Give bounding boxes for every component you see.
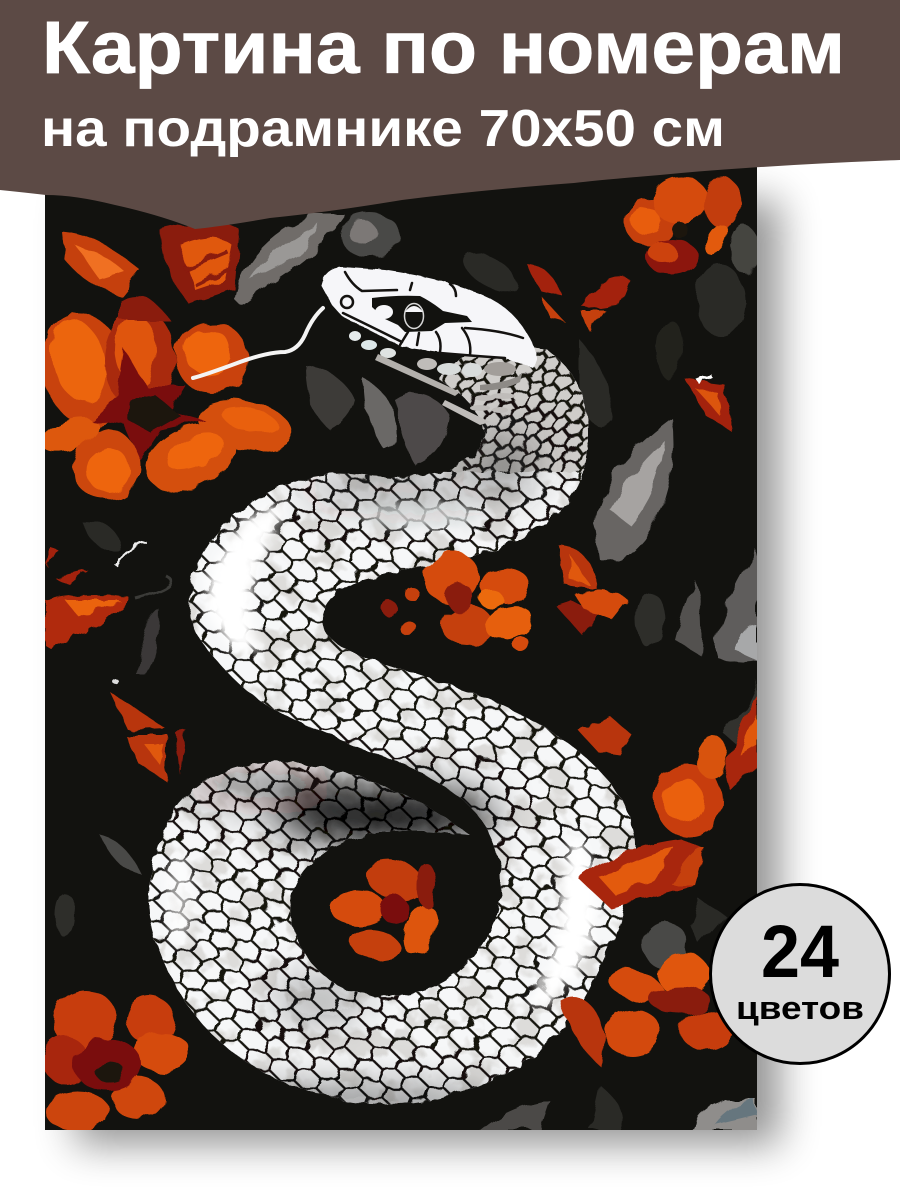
painting canvas xyxy=(29,150,759,1132)
flower: bottom left xyxy=(43,990,190,1132)
lower jaw scales xyxy=(349,331,522,425)
highlights on body xyxy=(166,500,596,1006)
badge: 24 colours: 24 xyxy=(761,910,839,993)
snake body with scales xyxy=(148,348,636,1105)
flower: right xyxy=(578,695,757,908)
butterfly: small right xyxy=(686,376,732,432)
butterfly: top centre xyxy=(525,262,630,332)
badge: 24 colours xyxy=(710,884,890,1064)
nostril xyxy=(341,296,353,308)
butterfly: left middle xyxy=(45,541,145,648)
head plate markings xyxy=(343,272,523,358)
title: Картина по номерам xyxy=(42,6,845,89)
snake tongue xyxy=(193,308,323,378)
butterfly: top left xyxy=(62,222,240,320)
canvas drop shadow xyxy=(75,200,780,1145)
large scale net xyxy=(148,470,634,1105)
snake head xyxy=(321,267,537,425)
butterfly: centre right xyxy=(555,545,628,635)
header banner xyxy=(0,0,900,229)
flower: bottom right xyxy=(560,953,732,1068)
subtitle: на подрамнике 70х50 см xyxy=(41,100,725,158)
gray foliage xyxy=(55,213,759,1130)
flower: centre xyxy=(382,552,536,651)
flower: lower centre xyxy=(330,858,439,962)
small plate left of eye xyxy=(375,305,393,319)
butterfly: lower left xyxy=(110,677,186,780)
small neck scales xyxy=(439,348,588,474)
small red butterfly on body xyxy=(578,716,632,755)
upper head plate xyxy=(321,267,537,368)
flower: large left xyxy=(45,312,292,500)
badge: 24 colours: цветов xyxy=(736,990,864,1026)
flower: top right xyxy=(624,176,740,275)
black eye patch xyxy=(372,296,472,332)
eye xyxy=(404,304,424,328)
shadows on body xyxy=(175,435,535,1119)
